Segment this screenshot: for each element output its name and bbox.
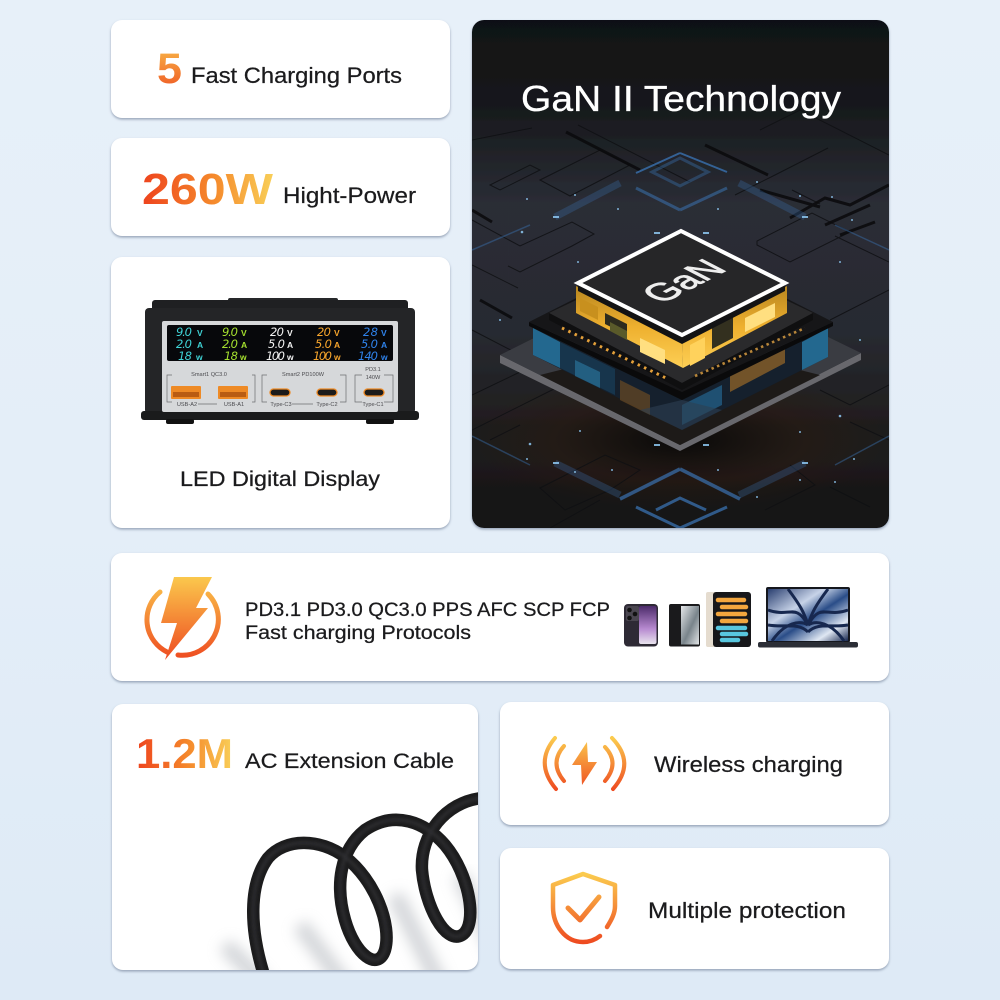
gold chip core xyxy=(576,283,787,368)
panel: multiple protection xyxy=(500,848,889,969)
panel: 260W high power xyxy=(111,138,450,236)
LED readouts: 2.0 xyxy=(222,337,238,351)
LED readouts: 18 xyxy=(178,349,192,363)
chip top with GaN label: GaN xyxy=(632,254,736,308)
LED readouts: 140 xyxy=(358,349,378,363)
protocols text: Fast charging Protocols xyxy=(245,623,471,644)
LED readouts: 5.0 xyxy=(268,337,285,351)
LED readouts: A xyxy=(197,340,203,350)
label: fast charging ports: Fast Charging Ports xyxy=(191,63,402,88)
icon: lightning bolt in ring xyxy=(147,577,218,660)
glass layer xyxy=(533,328,828,430)
port groups: USB-A2 xyxy=(177,402,197,408)
port groups xyxy=(167,367,393,408)
charger body xyxy=(141,298,419,424)
LED readouts: 28 xyxy=(363,325,378,339)
coiled black cable xyxy=(225,798,500,985)
port groups: PD3.1 xyxy=(365,367,381,373)
LED readouts: 20 xyxy=(317,325,331,339)
panel: 5 fast charging ports xyxy=(111,20,450,118)
big number 1.2M: 1.2M xyxy=(136,730,233,777)
label: hight-power: Hight-Power xyxy=(283,183,416,208)
LED readouts: V xyxy=(197,328,203,338)
label: AC extension cable: AC Extension Cable xyxy=(245,750,454,773)
port groups: USB-A1 xyxy=(224,402,244,408)
LED readouts: w xyxy=(380,352,388,362)
icon: laptop xyxy=(758,587,858,648)
port groups: Smart2 PD100W xyxy=(282,372,325,378)
port groups: Smart1 QC3.0 xyxy=(191,372,227,378)
devices: phones, tablet, laptop xyxy=(624,587,858,648)
panel: fast charging protocols xyxy=(111,553,889,681)
port groups: 140W xyxy=(366,375,381,381)
icon: wireless charging waves and bolt xyxy=(545,738,624,789)
LED readouts: V xyxy=(287,328,293,338)
icon: tablet xyxy=(706,592,751,647)
LED readouts: V xyxy=(241,328,247,338)
title: GaN II technology: GaN II Technology xyxy=(521,78,841,119)
LED readouts: A xyxy=(334,340,340,350)
LED readouts: 5.0 xyxy=(315,337,332,351)
icon: samsung phone xyxy=(669,604,700,646)
icon: shield with check xyxy=(553,874,615,942)
chip base plate xyxy=(500,265,861,451)
port groups: Type-C1 xyxy=(362,402,384,408)
panel: AC extension cable xyxy=(112,704,500,985)
label: multiple protection: Multiple protection xyxy=(648,898,846,923)
protocols text: PD3.1 PD3.0 QC3.0 PPS AFC SCP FCP xyxy=(245,600,610,621)
LED readouts xyxy=(176,325,388,363)
LED readouts: 9.0 xyxy=(222,325,238,339)
LED readouts: V xyxy=(334,328,340,338)
panel: wireless charging xyxy=(500,702,889,825)
circuit board background xyxy=(470,110,890,528)
panel: LED digital display xyxy=(111,257,450,528)
label: wireless charging: Wireless charging xyxy=(654,752,843,777)
LED readouts: A xyxy=(287,340,293,350)
port groups: Type-C2 xyxy=(316,402,338,408)
chip top with GaN label xyxy=(578,231,785,335)
LED readouts: V xyxy=(381,328,387,338)
LED readouts: w xyxy=(333,352,341,362)
LED readouts: A xyxy=(241,340,247,350)
port groups: Type-C3 xyxy=(270,402,292,408)
icon: purple phone xyxy=(624,604,658,646)
LED readouts: 2.0 xyxy=(176,337,192,351)
big number 260W: 260W xyxy=(142,165,274,214)
black interposer plate xyxy=(529,245,833,400)
LED readouts: w xyxy=(195,352,203,362)
LED readouts: 5.0 xyxy=(361,337,378,351)
LED readouts: 100 xyxy=(313,349,332,363)
LED readouts: 20 xyxy=(270,325,284,339)
LED readouts: 9.0 xyxy=(176,325,192,339)
LED readouts: w xyxy=(286,352,294,362)
charger device front view xyxy=(141,298,419,424)
LED readouts: A xyxy=(381,340,387,350)
LED readouts: 18 xyxy=(224,349,238,363)
LED readouts: 100 xyxy=(266,349,285,363)
big number 5: 5 xyxy=(157,45,182,93)
GaN chip illustration xyxy=(500,231,861,451)
panel: GaN II technology xyxy=(470,20,890,528)
label: LED digital display: LED Digital Display xyxy=(180,468,381,491)
LED readouts: w xyxy=(239,352,247,362)
protocols text xyxy=(245,600,610,644)
